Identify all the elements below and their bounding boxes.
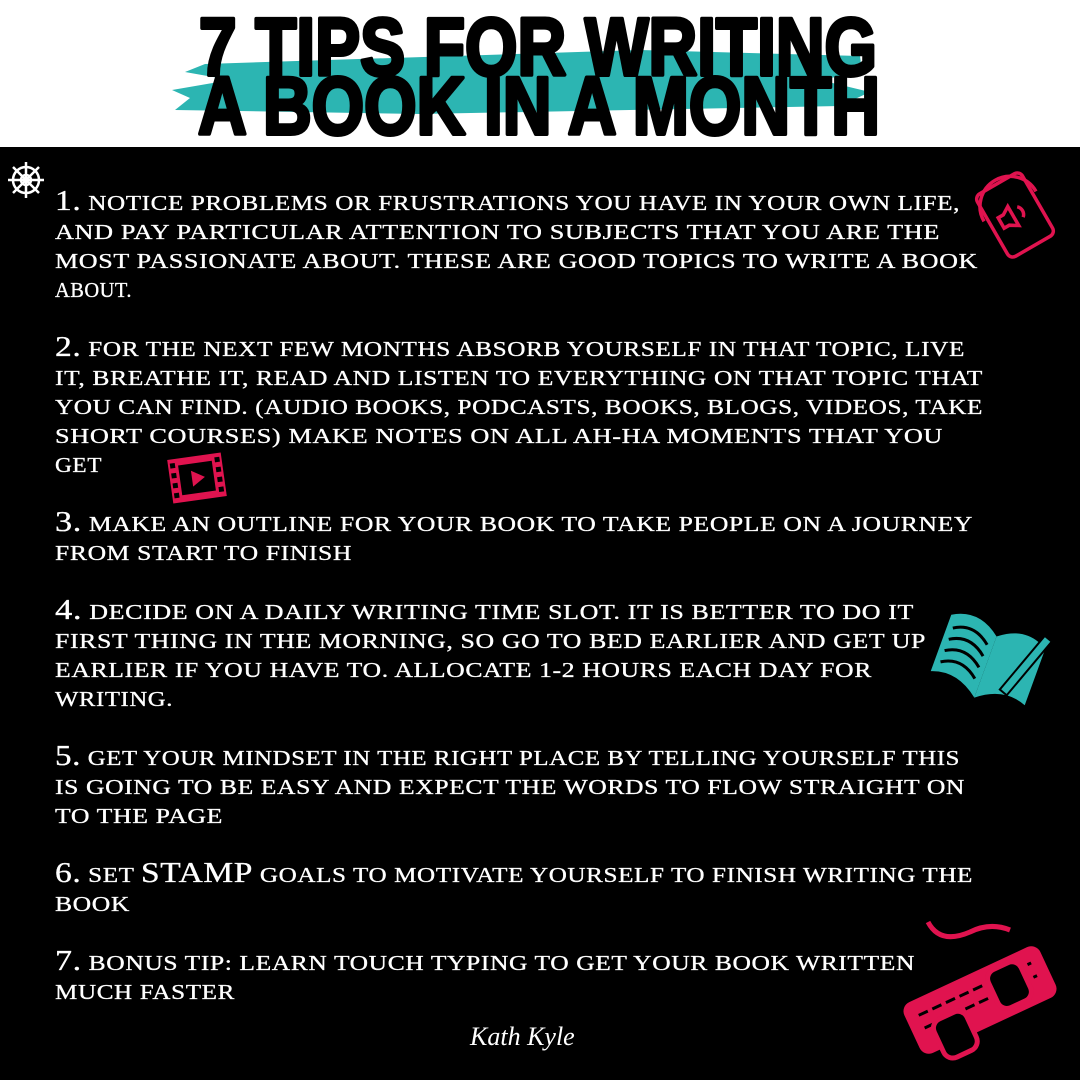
- icon: film strip: [167, 452, 227, 504]
- tip 2: SHORT COURSES) MAKE NOTES ON ALL AH-HA MOMENTS THAT YOU: [55, 424, 943, 448]
- icon: ship wheel: [8, 162, 44, 198]
- tip 4: WRITING.: [55, 687, 173, 711]
- tip 7: 7. BONUS TIP: LEARN TOUCH TYPING TO GET YOUR BOOK WRITTEN: [55, 946, 915, 977]
- header background: [0, 0, 1080, 147]
- tip 1: MOST PASSIONATE ABOUT. THESE ARE GOOD TOPICS TO WRITE A BOOK: [55, 249, 978, 273]
- title: 7 TIPS FOR WRITING: [199, 2, 877, 93]
- tip 2: YOU CAN FIND. (AUDIO BOOKS, PODCASTS, BOOKS, BLOGS, VIDEOS, TAKE: [55, 395, 983, 419]
- tip 3: [55, 507, 973, 565]
- tip 3: FROM START TO FINISH: [55, 541, 352, 565]
- tip 2: 2. FOR THE NEXT FEW MONTHS ABSORB YOURSELF IN THAT TOPIC, LIVE: [55, 332, 965, 363]
- tip 5: TO THE PAGE: [55, 804, 223, 828]
- tip 3: 3. MAKE AN OUTLINE FOR YOUR BOOK TO TAKE PEOPLE ON A JOURNEY: [55, 507, 973, 538]
- tip 7: MUCH FASTER: [55, 980, 235, 1004]
- tip 1: ABOUT.: [55, 278, 132, 302]
- icon: keyboard with hands: [900, 922, 1066, 1070]
- tip 5: 5. GET YOUR MINDSET IN THE RIGHT PLACE BY TELLING YOURSELF THIS: [55, 741, 960, 772]
- tip 1: AND PAY PARTICULAR ATTENTION TO SUBJECTS THAT YOU ARE THE: [55, 220, 940, 244]
- tip 4: 4. DECIDE ON A DAILY WRITING TIME SLOT. IT IS BETTER TO DO IT: [55, 595, 914, 626]
- tip 4: EARLIER IF YOU HAVE TO. ALLOCATE 1-2 HOURS EACH DAY FOR: [55, 658, 872, 682]
- tip 4: [55, 595, 926, 711]
- icon: audio book: [969, 165, 1059, 261]
- tip 4: FIRST THING IN THE MORNING, SO GO TO BED EARLIER AND GET UP: [55, 629, 926, 653]
- tip 2: IT, BREATHE IT, READ AND LISTEN TO EVERYTHING ON THAT TOPIC THAT: [55, 366, 983, 390]
- tip 1: 1. NOTICE PROBLEMS OR FRUSTRATIONS YOU HAVE IN YOUR OWN LIFE,: [55, 186, 960, 217]
- tip 2: GET: [55, 453, 102, 477]
- tip 5: [55, 741, 965, 828]
- title: A BOOK IN A MONTH: [198, 61, 880, 152]
- icon: open book with pen: [927, 603, 1053, 716]
- title: [198, 2, 880, 152]
- tip 2: [55, 332, 983, 477]
- tip 1: [55, 186, 978, 302]
- tip 6: 6. SET STAMP GOALS TO MOTIVATE YOURSELF TO FINISH WRITING THE: [55, 858, 973, 889]
- tip 7: [55, 946, 915, 1004]
- tip 6: BOOK: [55, 892, 130, 916]
- tip 5: IS GOING TO BE EASY AND EXPECT THE WORDS TO FLOW STRAIGHT ON: [55, 775, 965, 799]
- tip 6: [55, 858, 973, 916]
- teal brush stroke: [172, 50, 870, 114]
- signature: Kath Kyle: [469, 1022, 575, 1051]
